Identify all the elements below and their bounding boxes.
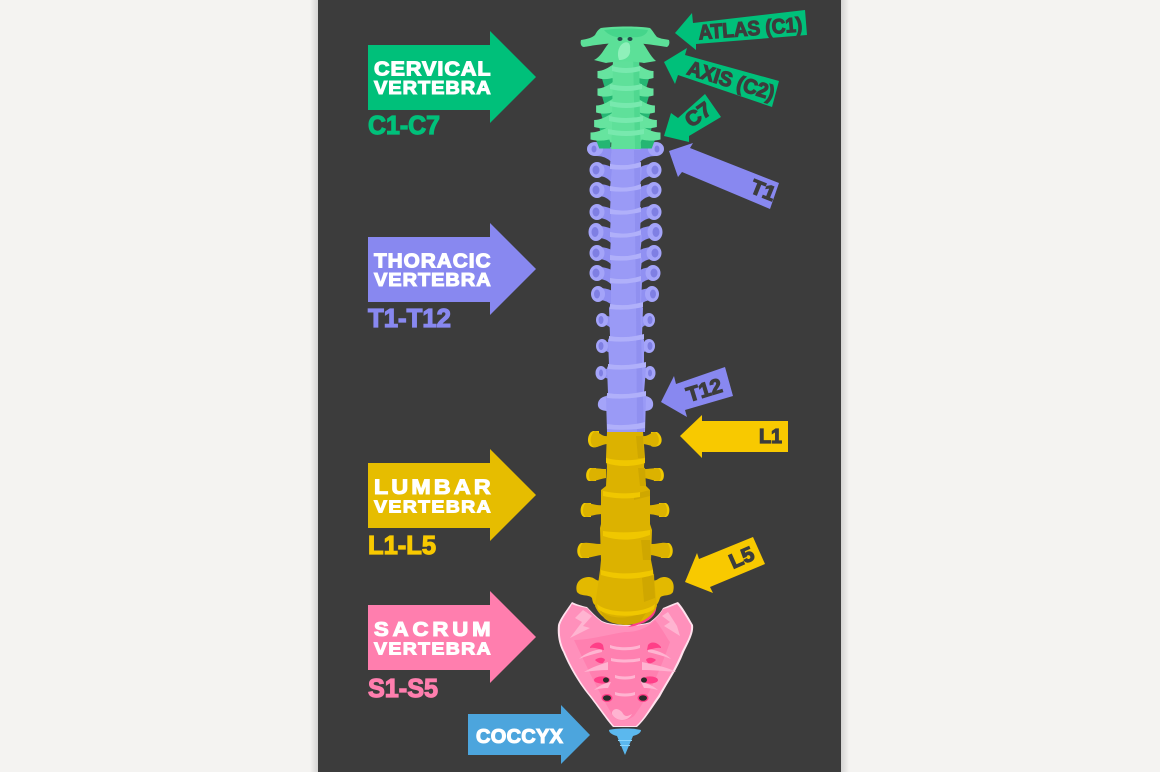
cervical heading arrow [368, 31, 536, 123]
coccyx heading arrow [468, 705, 590, 764]
callout arrow: T1 [669, 143, 779, 209]
cervical heading arrow: VERTEBRA [374, 79, 491, 99]
lumbar heading arrow: VERTEBRA [374, 496, 491, 516]
callout arrow: atlas C1: ATLAS (C1) [698, 13, 803, 44]
callout arrow: L5 [685, 537, 765, 593]
callout arrow: T1: T1 [747, 175, 779, 206]
sacrum heading arrow [368, 591, 536, 683]
callout arrow: L5: L5 [726, 542, 758, 574]
callout arrow: axis C2: AXIS (C2) [685, 57, 777, 105]
lumbar heading arrow: LUMBAR [374, 475, 491, 499]
thoracic heading arrow: THORACIC [374, 251, 491, 272]
callout arrow: T12: T12 [684, 374, 725, 407]
thoracic range label: T1-T12 [368, 303, 451, 333]
coccyx heading arrow: COCCYX [476, 726, 564, 748]
callout arrow: L1: L1 [759, 425, 782, 448]
coccyx [609, 728, 641, 755]
cervical vertebrae [581, 26, 669, 149]
spine illustration [558, 26, 693, 755]
lumbar vertebrae [576, 431, 674, 625]
sacrum heading arrow: SACRUM [374, 618, 491, 641]
lumbar heading arrow [368, 449, 536, 541]
cervical heading arrow: CERVICAL [374, 58, 491, 80]
callout arrow: C7: C7 [681, 98, 716, 132]
cervical range label: C1-C7 [368, 110, 440, 140]
callout arrow: atlas C1 [675, 10, 807, 50]
atlas [581, 26, 669, 47]
dark poster panel [310, 0, 849, 772]
callout arrow: T12 [661, 367, 733, 417]
thoracic heading arrow: VERTEBRA [374, 271, 491, 291]
thoracic vertebrae [587, 142, 664, 432]
sacrum range label: S1-S5 [368, 673, 438, 703]
callout arrow: axis C2 [664, 48, 779, 107]
callout arrow: L1 [680, 415, 788, 458]
thoracic heading arrow [368, 223, 536, 315]
lumbar range label: L1-L5 [368, 530, 436, 560]
callout arrow: C7 [664, 94, 721, 142]
axis [594, 40, 656, 63]
sacrum [558, 602, 693, 727]
sacrum heading arrow: VERTEBRA [374, 638, 491, 658]
